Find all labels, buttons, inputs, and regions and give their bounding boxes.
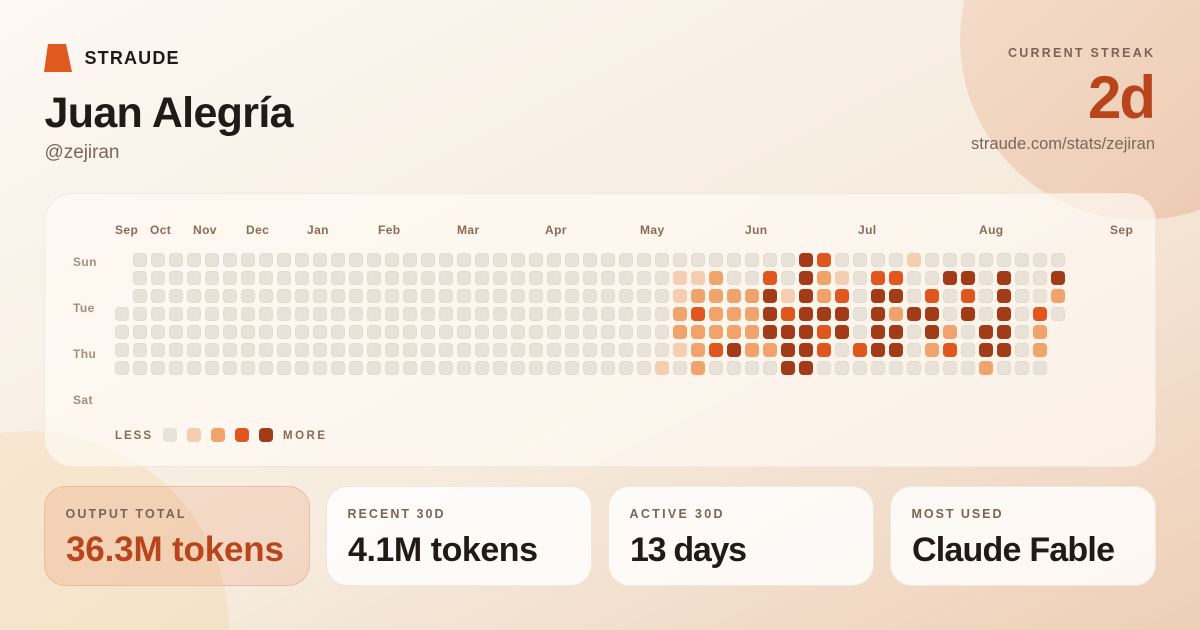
month labels: Jul [858, 223, 877, 237]
month labels: Sep [1110, 223, 1133, 237]
current streak label: CURRENT STREAK [1008, 46, 1153, 60]
month labels: Apr [545, 223, 567, 237]
weekday labels: Thu [73, 347, 96, 361]
row: Wednesday [673, 307, 1047, 321]
stat card: most used: MOST USED [912, 507, 1002, 521]
legend [115, 428, 325, 442]
weekday labels: Sat [73, 393, 93, 407]
panel: activity heatmap [44, 194, 1156, 466]
stat card: active 30d [608, 486, 874, 586]
stat card: active 30d: 13 days [630, 531, 747, 569]
stat card: active 30d: ACTIVE 30D [630, 507, 722, 521]
stat card: most used [890, 486, 1156, 586]
stat card: output total [44, 486, 310, 586]
row: Friday [673, 343, 1047, 357]
month labels: Mar [457, 223, 480, 237]
row: Saturday [655, 361, 993, 375]
row: Monday [673, 271, 1065, 285]
month labels: Jun [745, 223, 768, 237]
month labels: Sep [115, 223, 138, 237]
month labels: Dec [246, 223, 269, 237]
brand logo [44, 44, 72, 72]
weekday labels: Tue [73, 301, 95, 315]
profile url: straude.com/stats/zejiran [971, 135, 1155, 153]
stat card: recent 30d: 4.1M tokens [348, 531, 538, 569]
display name: Juan Alegría [44, 89, 295, 137]
stat card: most used: Claude Fable [912, 531, 1115, 569]
weekday labels: Sun [73, 255, 97, 269]
brand name: STRAUDE [84, 48, 178, 68]
weekday labels [73, 255, 97, 407]
stat card: output total: 36.3M tokens [66, 530, 284, 569]
month labels: Nov [193, 223, 217, 237]
heatmap grid [115, 253, 1069, 379]
legend: LESS [115, 430, 151, 442]
legend: MORE [283, 430, 325, 442]
row: Tuesday [673, 289, 1065, 303]
month labels: Feb [378, 223, 401, 237]
handle: @zejiran [44, 142, 120, 163]
stat card: recent 30d: RECENT 30D [348, 507, 444, 521]
month labels: Oct [150, 223, 171, 237]
month labels [115, 223, 1133, 237]
stat card: recent 30d [326, 486, 592, 586]
stat card: output total: OUTPUT TOTAL [66, 507, 185, 521]
month labels: Aug [979, 223, 1004, 237]
icon: logo trapezoid [44, 44, 72, 72]
row: Thursday [673, 325, 1047, 339]
row: Sunday [799, 253, 921, 267]
month labels: Jan [307, 223, 329, 237]
month labels: May [640, 223, 665, 237]
streak value: 2d [1088, 64, 1156, 131]
